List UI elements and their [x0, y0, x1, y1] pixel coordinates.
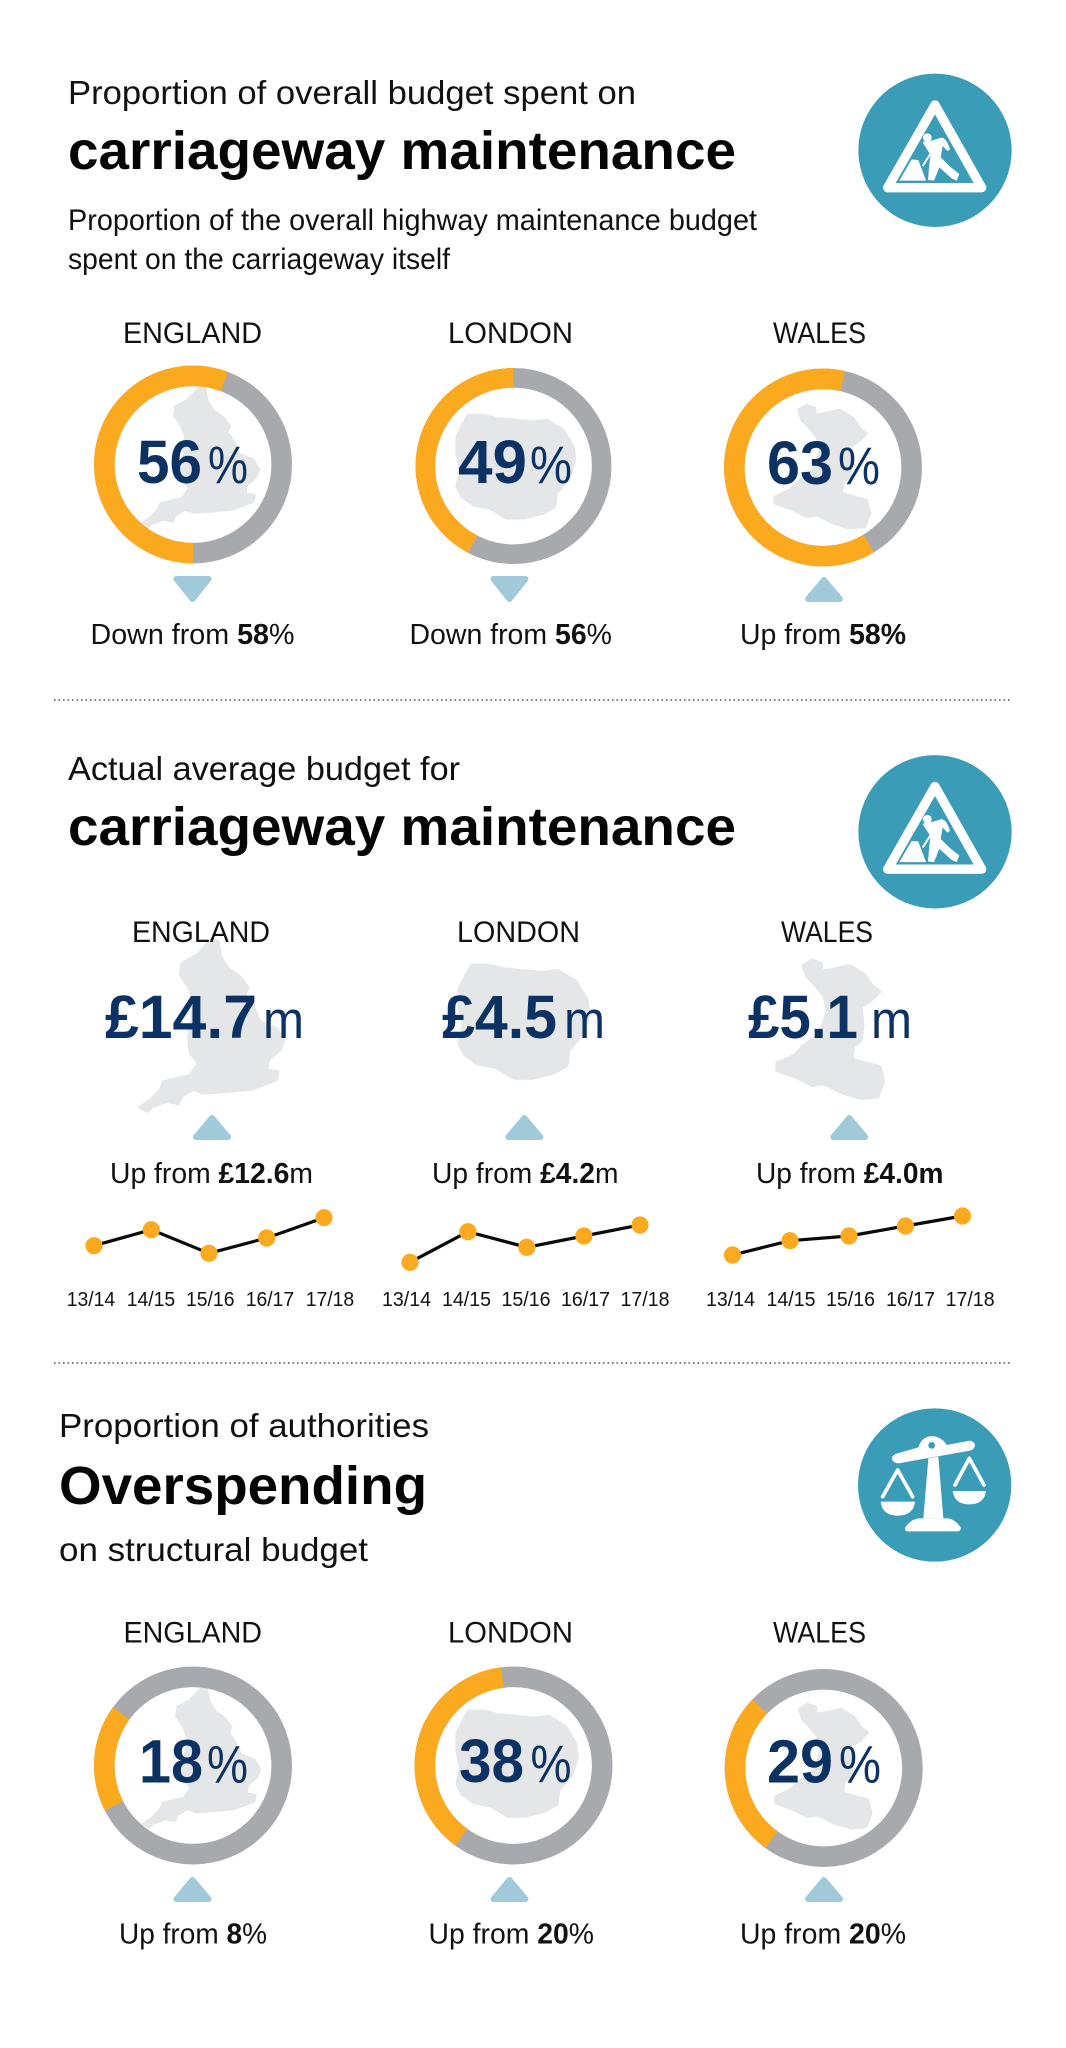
line chart: London: 13/14: [382, 1288, 431, 1311]
arrow: up: [808, 1880, 840, 1899]
value: 56%: 56: [137, 428, 202, 496]
donut chart: England 18%: [74, 1646, 312, 1885]
panel: carriageway maintenance proportion: [68, 74, 1012, 651]
label: London: LONDON: [448, 1616, 573, 1650]
label: Wales: WALES: [773, 1616, 866, 1650]
value: 18%: %: [207, 1736, 248, 1794]
line chart: London: 14/15: [442, 1288, 491, 1311]
line chart: London: 16/17: [561, 1288, 610, 1311]
value: 29%: %: [839, 1736, 881, 1794]
line chart: Wales: 15/16: [826, 1288, 875, 1311]
title: overspending: Overspending: [59, 1456, 427, 1516]
text block: description: spent on the carriageway itself: [68, 243, 451, 276]
line chart: England: 16/17: [246, 1288, 294, 1311]
value: £14.7m: £14.7: [105, 983, 257, 1051]
column: Wales 63%: [701, 317, 945, 651]
value: 29%: 29: [767, 1728, 833, 1796]
map: London: [459, 965, 589, 1078]
change: down from 56%: Down from 56%: [410, 619, 612, 651]
value: 18%: 18: [139, 1728, 203, 1796]
value: 29%: [767, 1728, 881, 1796]
text block: description: Proportion of the overall highway maintenance budget: [68, 204, 757, 237]
label: Wales: WALES: [773, 317, 866, 350]
line chart: Wales: [706, 1207, 995, 1311]
line chart: Wales: 17/18: [946, 1288, 995, 1311]
value: 63%: %: [838, 437, 880, 496]
change: up from 20%: Up from 20%: [740, 1918, 906, 1950]
map: England: [139, 939, 284, 1112]
value: 63%: [767, 429, 880, 497]
change: up from 8%: Up from 8%: [119, 1918, 267, 1950]
title: carriageway maintenance: carriageway maintenance: [68, 797, 736, 857]
panel: overspending: [59, 1407, 1011, 1950]
map: London: [457, 415, 575, 518]
icon: roadworks sign: [858, 74, 1012, 227]
value: 56%: [137, 428, 248, 496]
value: £4.5m: m: [564, 991, 605, 1050]
column: England £14.7m: [67, 916, 354, 1311]
arrow: up: [508, 1118, 540, 1137]
map: Wales: [775, 405, 870, 528]
heading: actual average budget: Actual average budget for: [68, 750, 460, 787]
map: Wales: [776, 1704, 871, 1828]
label: England: ENGLAND: [123, 317, 262, 350]
change: up from 58%: Up from 58%: [740, 619, 906, 651]
arrow: up: [808, 580, 840, 599]
donut chart: Wales 63%: [701, 346, 945, 589]
value: 38%: %: [530, 1735, 572, 1794]
panel: actual average budget: [67, 750, 1012, 1311]
value: £5.1m: £5.1: [748, 983, 858, 1051]
label: London: LONDON: [457, 916, 580, 949]
label: Wales: WALES: [781, 916, 873, 949]
arrow: up: [176, 1880, 208, 1899]
value: 18%: [139, 1728, 248, 1796]
line chart: London: [382, 1216, 670, 1311]
value: 56%: %: [208, 436, 248, 495]
text block: description: [68, 204, 757, 276]
value: 63%: 63: [767, 429, 833, 497]
icon: roadworks sign: [858, 755, 1012, 908]
change: up from £4.2m: Up from £4.2m: [432, 1158, 618, 1190]
column: London 38%: [390, 1616, 637, 1950]
column: England 18%: [74, 1616, 312, 1950]
label: England: ENGLAND: [124, 1616, 262, 1650]
line chart: England: 13/14: [67, 1288, 115, 1311]
value: 38%: 38: [459, 1727, 524, 1795]
map: England: [141, 387, 259, 528]
donut chart: London 38%: [390, 1642, 637, 1889]
line chart: London: 15/16: [502, 1288, 550, 1311]
heading: proportion intro: Proportion of overall budget spent on: [68, 74, 636, 111]
line chart: Wales: 13/14: [706, 1288, 755, 1311]
label: London: LONDON: [448, 317, 573, 350]
column: London 49%: [395, 317, 632, 651]
line chart: England: 17/18: [306, 1288, 354, 1311]
value: £14.7m: m: [263, 991, 304, 1050]
line chart: London: 17/18: [620, 1288, 670, 1311]
change: up from £4.0m: Up from £4.0m: [756, 1158, 944, 1190]
arrow: up: [833, 1118, 865, 1137]
column: England 56%: [90, 317, 294, 651]
arrow: down: [176, 579, 208, 599]
map: London: [457, 1711, 578, 1816]
value: 49%: [458, 428, 572, 496]
change: down from 58%: Down from 58%: [90, 619, 294, 651]
line chart: England: 15/16: [186, 1288, 234, 1311]
column: Wales 29%: [700, 1616, 948, 1950]
donut chart: Wales 29%: [700, 1644, 948, 1892]
value: 49%: %: [530, 436, 572, 495]
value: 49%: 49: [458, 428, 527, 496]
value: 38%: [459, 1727, 572, 1795]
line chart: Wales: 14/15: [766, 1288, 816, 1311]
label: England: ENGLAND: [132, 916, 270, 949]
map: Wales: [777, 960, 884, 1099]
value: £4.5m: £4.5: [442, 983, 557, 1051]
donut chart: London 49%: [395, 347, 632, 585]
value: £5.1m: m: [871, 991, 912, 1050]
text block: on structural budget: on structural budget: [59, 1531, 368, 1568]
change: up from £12.6m: Up from £12.6m: [110, 1158, 313, 1190]
line chart: England: 14/15: [127, 1288, 175, 1311]
change: up from 20%: Up from 20%: [428, 1918, 594, 1950]
donut chart: England 56%: [104, 376, 282, 553]
title: carriageway maintenance: carriageway maintenance: [68, 121, 736, 181]
arrow: up: [196, 1118, 228, 1137]
line chart: Wales: 16/17: [886, 1288, 935, 1311]
column: Wales £5.1m: [706, 916, 995, 1311]
column: London £4.5m: [382, 916, 670, 1311]
map: England: [143, 1688, 260, 1827]
arrow: up: [494, 1880, 526, 1899]
line chart: England: [67, 1209, 354, 1311]
arrow: down: [494, 579, 526, 599]
heading: proportion of authorities: Proportion of authorities: [59, 1407, 429, 1444]
icon: scales: [858, 1408, 1011, 1562]
